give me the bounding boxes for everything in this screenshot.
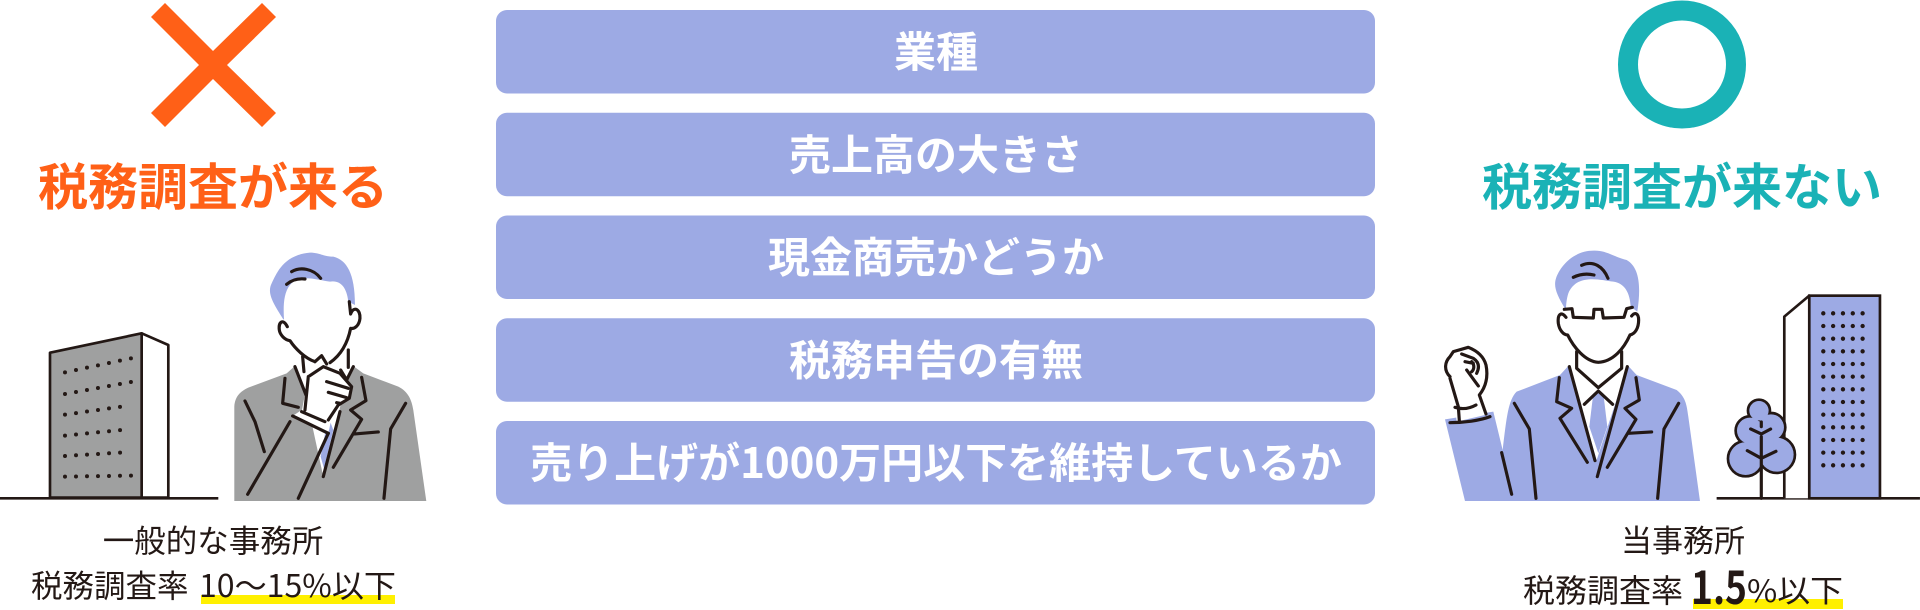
factor: cash business [496,216,1375,299]
illustration: blue office building [1717,296,1920,498]
panel: factors [496,10,1375,504]
illustration: confident man in blue suit [1445,251,1700,501]
factor: revenue size [496,113,1375,196]
factor: tax filing: 税務申告の有無 [789,328,1083,388]
caption: audit rate 10-15%: 税務調査率 [31,561,189,607]
factor: sales under 10 million yen: 売り上げが1000万円以下を維持しているか [530,430,1342,491]
heading: audited: 税務調査が来る [38,148,388,220]
factor: revenue size: 売上高の大きさ [789,122,1083,183]
panel: left, audited [0,3,426,607]
yellow highlight [201,595,395,604]
illustration: grey office building [0,333,218,498]
caption: audit rate 1.5%: %以下 [1747,566,1843,610]
factor: industry: 業種 [894,19,978,80]
factor: sales under 10 million yen [496,421,1375,504]
factor: cash business: 現金商売かどうか [768,224,1104,286]
caption: audit rate 1.5% [1523,552,1843,610]
caption: audit rate 10-15% [31,561,396,607]
yellow highlight [1693,599,1843,609]
illustration: tree [1729,401,1794,498]
factor: industry [496,10,1375,94]
icon: cross mark [151,3,276,127]
caption: general firm: 一般的な事務所 [103,516,323,562]
heading: not audited: 税務調査が来ない [1482,148,1882,220]
icon: circle mark [1628,10,1736,118]
illustration: thinking man in grey suit [234,253,426,501]
panel: right, not audited [1445,10,1920,610]
caption: our firm: 当事務所 [1621,516,1745,561]
factor: tax filing [496,318,1375,402]
caption: audit rate 10-15%: 10〜15%以下 [199,561,396,607]
